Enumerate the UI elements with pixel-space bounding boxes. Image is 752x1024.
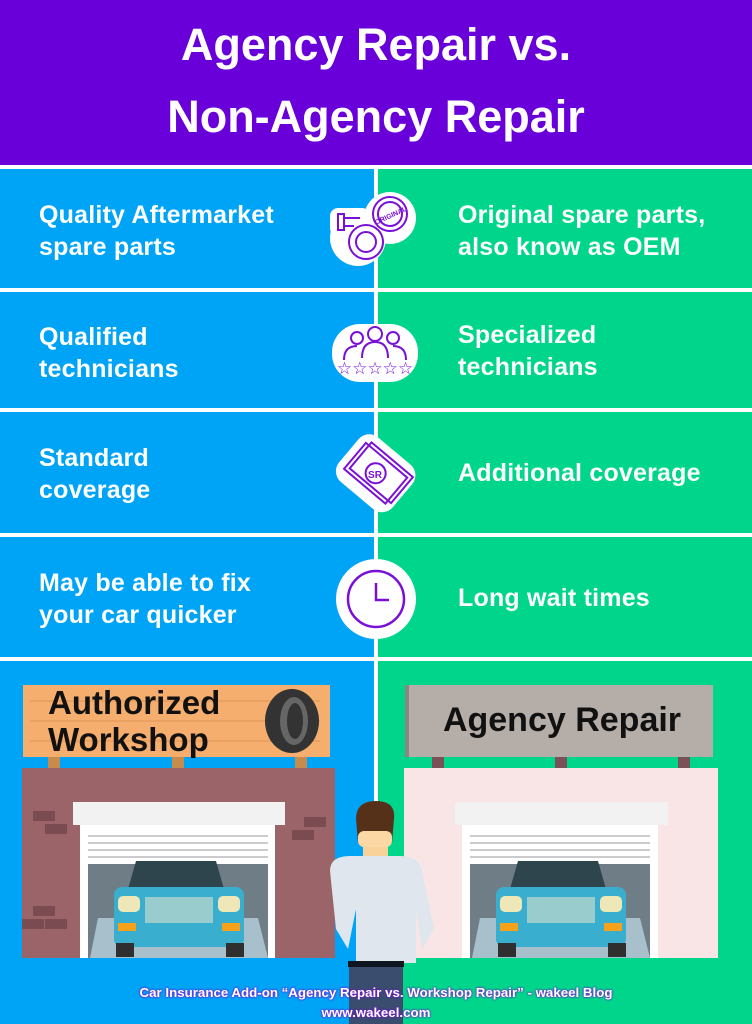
text: row4 left	[39, 569, 251, 629]
title: Non-Agency Repair	[167, 91, 585, 142]
text: row2 left: Qualified	[39, 323, 148, 351]
text: row2 left: technicians	[39, 355, 179, 383]
illustration: workshops and person: Workshop	[48, 721, 209, 758]
text: row3 left: Standard	[39, 444, 149, 472]
icon: turbo original	[330, 192, 416, 266]
text: row1 right: Original spare parts,	[458, 201, 705, 229]
text: row1 left: spare parts	[39, 233, 176, 261]
text: row1 right: also know as OEM	[458, 233, 681, 261]
illustration: workshops and person	[22, 684, 718, 1024]
text: row3 left: coverage	[39, 476, 150, 504]
footer caption: Car Insurance Add-on “Agency Repair vs. Workshop Repair” - wakeel Blog	[140, 985, 612, 1000]
illustration: workshops and person: Agency Repair	[443, 701, 681, 739]
text: row2 right: technicians	[458, 353, 598, 381]
text: row3 right: Additional coverage	[458, 459, 701, 487]
icon: turbo original: ORIGINAL	[374, 206, 409, 227]
text: row4 left: May be able to fix	[39, 569, 251, 597]
footer caption	[138, 985, 614, 1020]
text: row1 right	[458, 201, 705, 261]
text: row4 right: Long wait times	[458, 584, 650, 612]
text: row2 right	[458, 321, 598, 381]
icon: money SR	[336, 434, 416, 512]
icon: technicians stars	[332, 324, 418, 382]
title	[0, 0, 752, 165]
icon: money SR: SR	[368, 470, 383, 481]
icon: technicians stars: ☆☆☆☆☆	[337, 359, 413, 378]
text: row1 left	[39, 201, 274, 261]
text: row1 left: Quality Aftermarket	[39, 201, 274, 229]
text: row3 left	[39, 444, 150, 504]
footer caption: www.wakeel.com	[322, 1005, 430, 1020]
illustration: workshops and person: Authorized	[48, 684, 220, 721]
text: row2 right: Specialized	[458, 321, 596, 349]
icon: clock	[336, 559, 416, 639]
title: Agency Repair vs.	[181, 19, 571, 70]
text: row4 left: your car quicker	[39, 601, 237, 629]
text: row2 left	[39, 323, 179, 383]
